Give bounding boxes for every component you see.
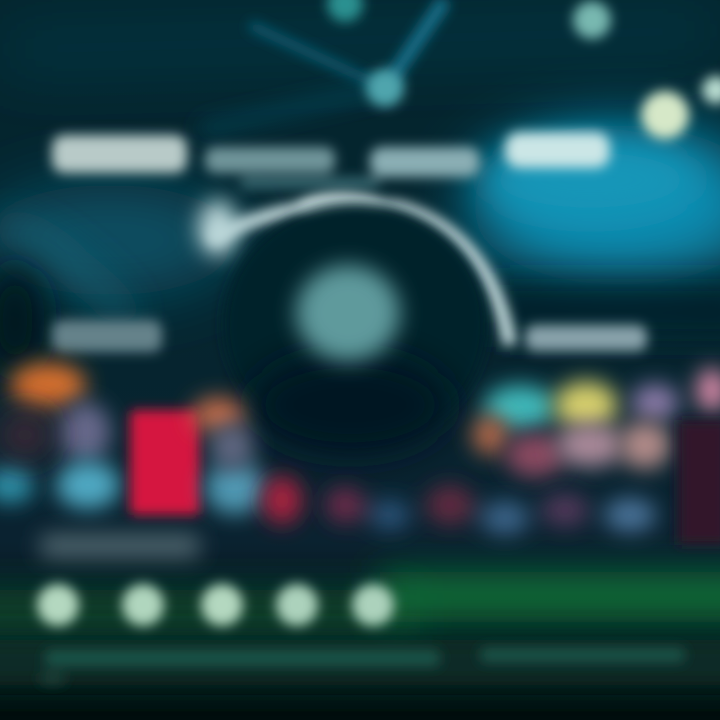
right colour blocks bbox=[472, 368, 720, 545]
lower heading blurred text bbox=[40, 534, 200, 558]
left colour blocks bbox=[0, 363, 302, 524]
central strip of colours bbox=[325, 485, 656, 535]
footer blurred text bbox=[40, 648, 685, 684]
red card bbox=[130, 410, 200, 515]
football bbox=[198, 193, 510, 455]
right label blurred text bbox=[525, 325, 647, 351]
pitch bbox=[0, 572, 720, 720]
ball centre panel bbox=[296, 265, 400, 361]
floodlight beams and lights bbox=[200, 0, 720, 139]
rating circles bbox=[37, 584, 394, 626]
left label blurred text bbox=[52, 320, 162, 352]
title blurred text bbox=[52, 132, 610, 188]
